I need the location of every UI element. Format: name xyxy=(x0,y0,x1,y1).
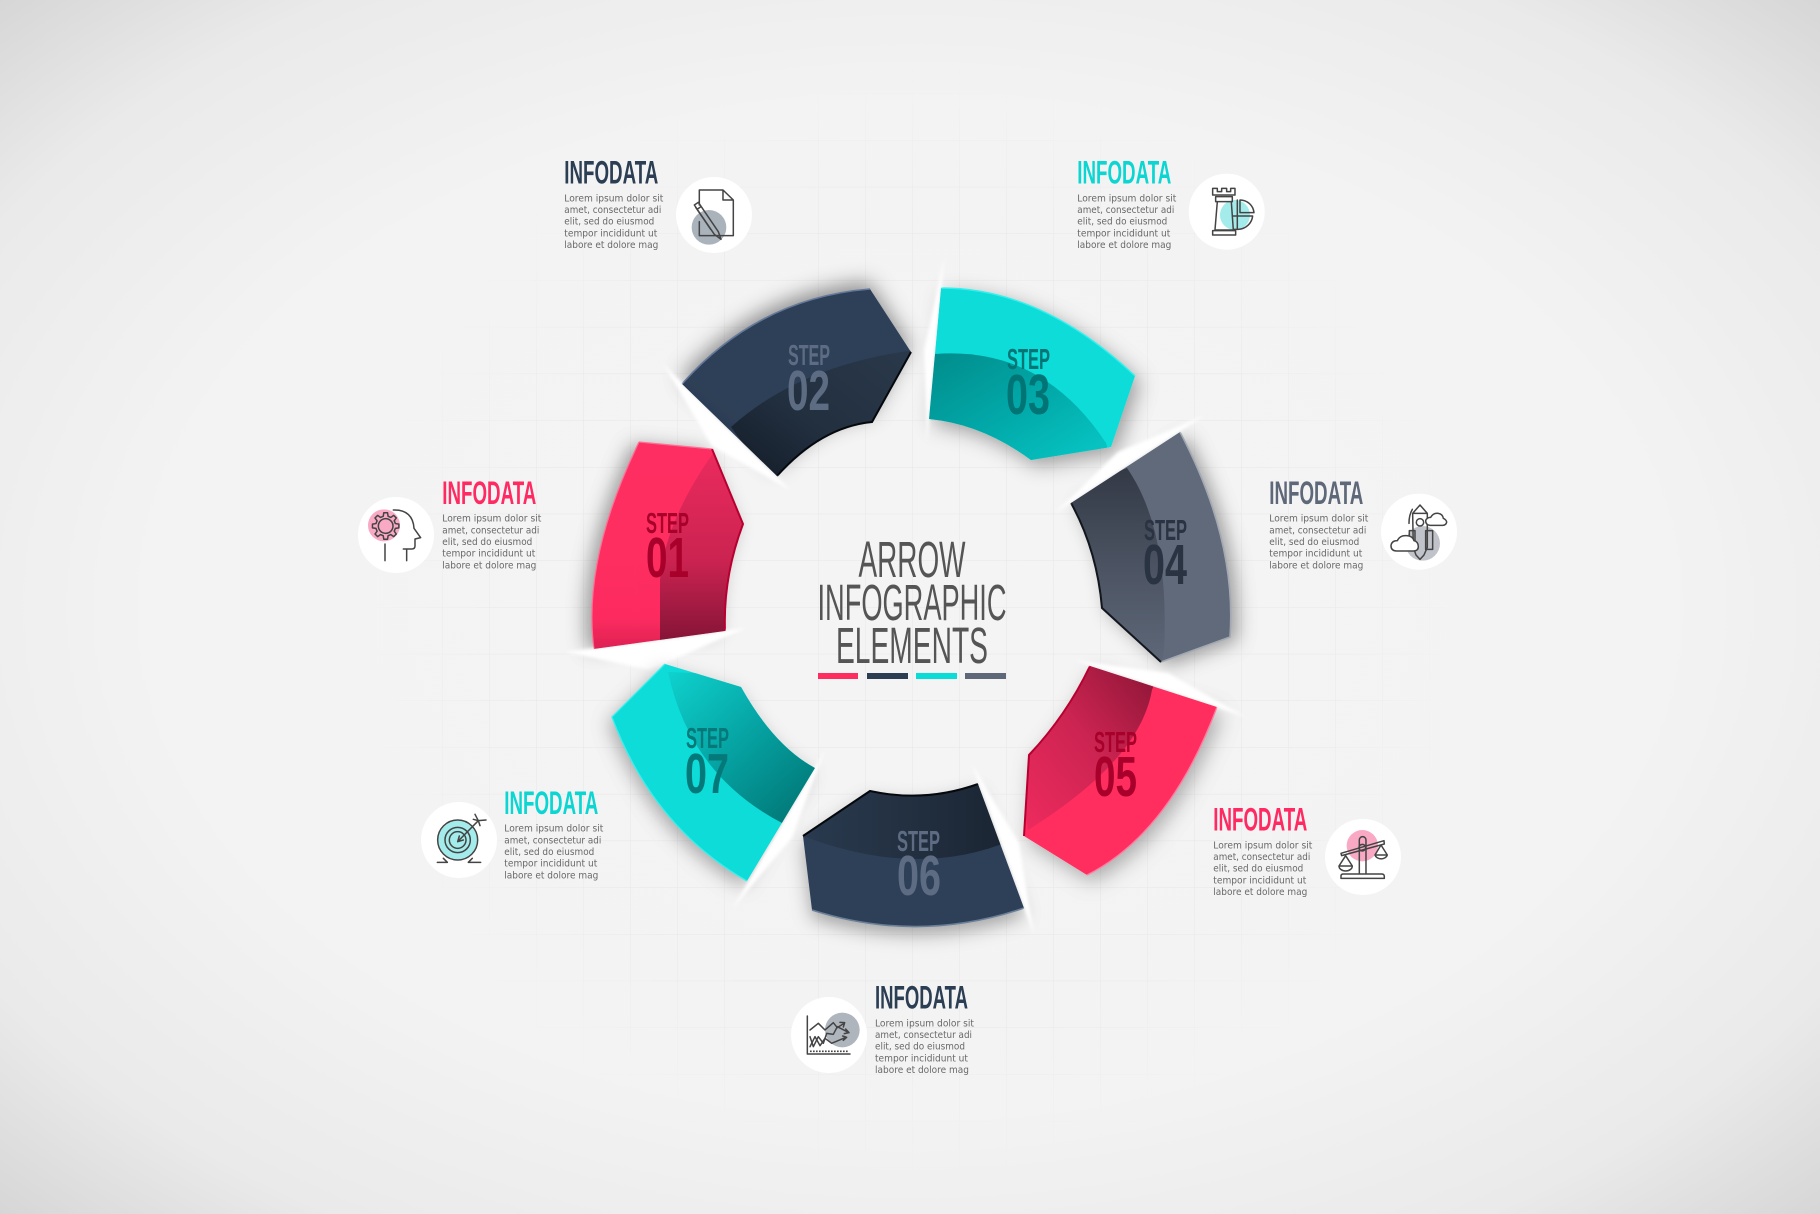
info block: step 04 xyxy=(1269,475,1368,571)
info block: step 01: tempor incididunt ut xyxy=(442,549,535,560)
icon: document and pen xyxy=(676,177,752,253)
info block: step 01 xyxy=(442,475,541,571)
label: step 01: 01 xyxy=(646,526,689,590)
info block: step 01: elit, sed do eiusmod xyxy=(442,537,532,548)
info block: step 05: elit, sed do eiusmod xyxy=(1213,864,1303,875)
center title: INFOGRAPHIC xyxy=(818,574,1006,631)
info block: step 02: amet, consectetur adi xyxy=(564,205,661,216)
segment: step 05 xyxy=(1015,650,1246,875)
info block: step 02: tempor incididunt ut xyxy=(564,228,657,239)
info block: step 02: labore et dolore mag xyxy=(564,240,658,251)
info block: step 02: INFODATA xyxy=(564,154,658,190)
icon: balance scales xyxy=(1325,819,1401,895)
label: step 01 xyxy=(646,508,689,590)
label: step 04: 04 xyxy=(1143,533,1187,597)
label: step 04 xyxy=(1143,515,1187,597)
info block: step 01: amet, consectetur adi xyxy=(442,525,539,536)
label: step 02: 02 xyxy=(787,359,830,423)
segment: step 02 xyxy=(663,289,915,490)
segment: step 07 xyxy=(612,664,830,908)
info block: step 03: Lorem ipsum dolor sit xyxy=(1077,193,1176,204)
label: step 07: 07 xyxy=(685,742,729,806)
segment: step 01 xyxy=(574,434,746,668)
icon: line chart with arrows xyxy=(791,997,867,1073)
center title: ARROW xyxy=(858,531,966,588)
info block: step 04: INFODATA xyxy=(1269,475,1363,511)
label: step 05: STEP xyxy=(1094,727,1137,759)
segment: step 04 xyxy=(1050,415,1231,670)
info block: step 05 xyxy=(1213,802,1312,898)
info block: step 05: labore et dolore mag xyxy=(1213,887,1307,898)
step labels xyxy=(646,340,1187,908)
info block: step 05: Lorem ipsum dolor sit xyxy=(1213,840,1312,851)
arrow ring xyxy=(565,258,1246,935)
info block: step 02 xyxy=(564,154,663,251)
center title xyxy=(818,531,1006,674)
info block: step 06: amet, consectetur adi xyxy=(875,1030,972,1041)
info block: step 03: amet, consectetur adi xyxy=(1077,205,1174,216)
info block: step 07: INFODATA xyxy=(504,785,598,821)
label: step 02 xyxy=(787,340,830,423)
label: step 05 xyxy=(1094,727,1137,809)
info block: step 03: elit, sed do eiusmod xyxy=(1077,217,1167,228)
label: step 03 xyxy=(1006,344,1050,427)
label: step 02: STEP xyxy=(788,340,830,372)
label: step 07 xyxy=(685,723,729,806)
info block: step 04: Lorem ipsum dolor sit xyxy=(1269,514,1368,525)
icon: target and arrow xyxy=(421,802,497,878)
info block: step 05: INFODATA xyxy=(1213,802,1307,838)
label: step 01: STEP xyxy=(646,508,689,540)
info block: step 06: Lorem ipsum dolor sit xyxy=(875,1018,974,1029)
label: step 06: STEP xyxy=(897,826,940,858)
info block: step 07: amet, consectetur adi xyxy=(504,835,601,846)
info block: step 04: tempor incididunt ut xyxy=(1269,549,1362,560)
info block: step 02: elit, sed do eiusmod xyxy=(564,217,654,228)
info block: step 03: INFODATA xyxy=(1077,154,1171,190)
info block: step 06: INFODATA xyxy=(875,979,968,1015)
segment: step 03 xyxy=(920,258,1135,470)
info block: step 05: amet, consectetur adi xyxy=(1213,852,1310,863)
info block: step 04: elit, sed do eiusmod xyxy=(1269,537,1359,548)
icon: chess rook and pie chart xyxy=(1189,174,1265,250)
info block: step 03: labore et dolore mag xyxy=(1077,240,1171,251)
info block: step 06 xyxy=(875,979,974,1076)
info block: step 01: INFODATA xyxy=(442,475,536,511)
info block: step 07 xyxy=(504,785,603,881)
label: step 07: STEP xyxy=(686,723,729,755)
label: step 03: 03 xyxy=(1006,363,1050,427)
info block: step 01: labore et dolore mag xyxy=(442,560,536,571)
label: step 05: 05 xyxy=(1094,745,1137,809)
icon: head with gear xyxy=(358,497,434,573)
info block: step 03: tempor incididunt ut xyxy=(1077,228,1170,239)
label: step 06: 06 xyxy=(897,844,941,908)
info block: step 03 xyxy=(1077,154,1176,251)
info block: step 06: labore et dolore mag xyxy=(875,1065,969,1076)
info block: step 07: elit, sed do eiusmod xyxy=(504,847,594,858)
info block: step 01: Lorem ipsum dolor sit xyxy=(442,514,541,525)
info block: step 06: elit, sed do eiusmod xyxy=(875,1042,965,1053)
info block: step 06: tempor incididunt ut xyxy=(875,1053,968,1064)
info block: step 04: labore et dolore mag xyxy=(1269,560,1363,571)
info block: step 04: amet, consectetur adi xyxy=(1269,525,1366,536)
info block: step 02: Lorem ipsum dolor sit xyxy=(564,193,663,204)
label: step 06 xyxy=(897,826,941,908)
info block: step 07: labore et dolore mag xyxy=(504,870,598,881)
center title: ELEMENTS xyxy=(836,617,988,674)
label: step 03: STEP xyxy=(1007,344,1050,376)
info block: step 07: Lorem ipsum dolor sit xyxy=(504,824,603,835)
color key bars xyxy=(818,673,1006,679)
info block: step 05: tempor incididunt ut xyxy=(1213,875,1306,886)
info block: step 07: tempor incididunt ut xyxy=(504,859,597,870)
segment: step 06 xyxy=(795,764,1034,935)
label: step 04: STEP xyxy=(1144,515,1187,547)
icon: rocket and clouds xyxy=(1381,494,1457,570)
